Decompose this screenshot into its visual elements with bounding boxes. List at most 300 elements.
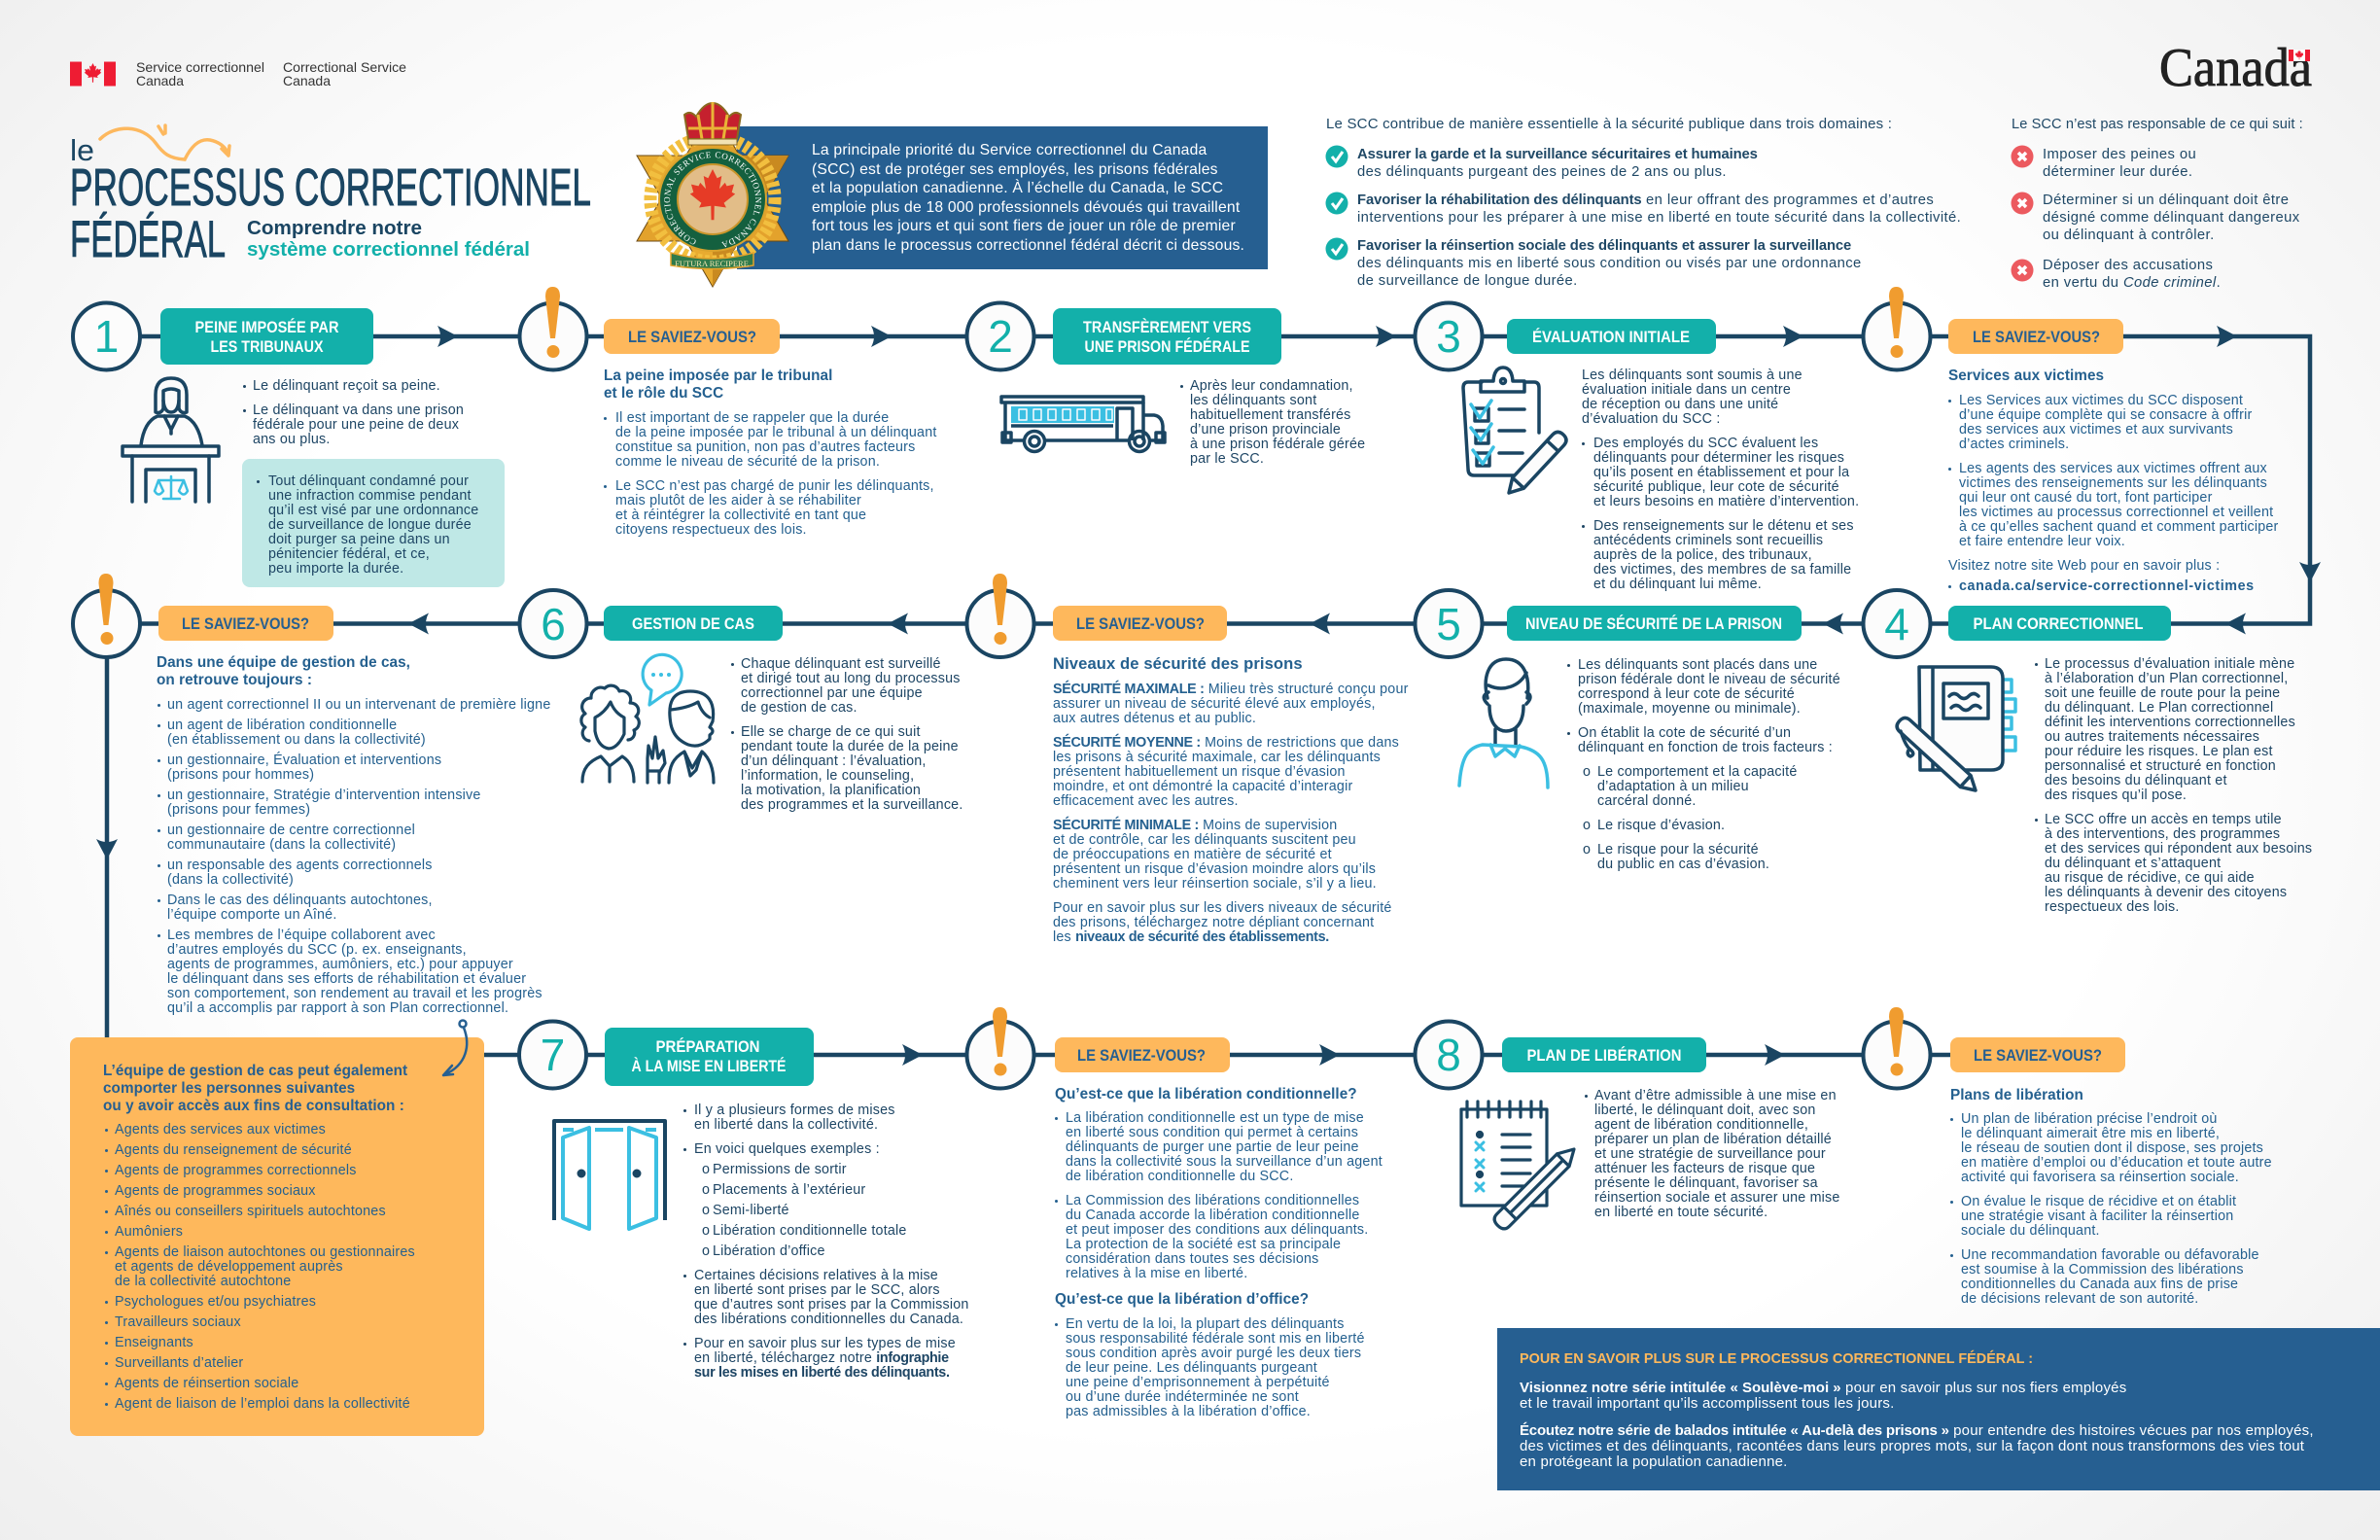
pill: did you know 3: LE SAVIEZ-VOUS? bbox=[182, 614, 309, 633]
text: step 7: Il y a plusieurs formes de mises bbox=[694, 1102, 895, 1118]
text: step 1 note: peu importe la durée. bbox=[268, 561, 403, 577]
text: learn more paragraphs: et le travail important qu’ils accomplissent tous les jours. bbox=[1520, 1395, 1894, 1412]
text: orange panel team list: Agents du renseignement de sécurité bbox=[115, 1142, 352, 1158]
text: step 1: ans ou plus. bbox=[253, 432, 331, 447]
text: step 6: d’un délinquant : l’évaluation, bbox=[741, 753, 927, 769]
text: step 3: de réception ou dans une unité bbox=[1582, 397, 1778, 412]
text: did you know 4 security levels bbox=[1053, 654, 1409, 945]
text: learn more paragraphs: Écoutez notre série de balados intitulée « Au-delà des prisons » pour entendre des histoires vécues par nos employés, bbox=[1520, 1422, 2314, 1439]
text: did you know 5 parole: La libération conditionnelle est un type de mise bbox=[1066, 1110, 1364, 1126]
icon: case management team bbox=[581, 654, 714, 783]
text: did you know 4 security levels: Niveaux de sécurité des prisons bbox=[1053, 654, 1303, 673]
text: did you know 2: victimes des renseignements sur les délinquants bbox=[1959, 475, 2267, 491]
text: step 8 bbox=[1585, 1088, 1840, 1220]
text: did you know 3 team: on retrouve toujours : bbox=[157, 671, 312, 688]
text: step 1: fédérale pour une peine de deux bbox=[253, 416, 459, 432]
text: step 6: correctionnel par une équipe bbox=[741, 685, 923, 701]
text: not responsible list: Imposer des peines ou bbox=[2043, 147, 2196, 162]
text: not responsible list: en vertu du Code criminel. bbox=[2043, 275, 2221, 291]
text: step 7: en liberté sont prises par le SCC, alors bbox=[694, 1282, 940, 1298]
text: did you know 4 security levels: les prisons à sécurité maximale, car les délinquants bbox=[1053, 749, 1381, 764]
pill: did you know 4 bbox=[1053, 606, 1227, 641]
text: step 5: Le risque d’évasion. bbox=[1597, 817, 1725, 832]
text: did you know 2: d’actes criminels. bbox=[1959, 437, 2069, 452]
step 7 number: 7 bbox=[541, 1030, 565, 1080]
text: step 7: en liberté, téléchargez notre infographie bbox=[694, 1350, 949, 1366]
text: did you know 6 release plans: Une recommandation favorable ou défavorable bbox=[1961, 1246, 2259, 1262]
text: did you know 2: les victimes au processus correctionnel et veillent bbox=[1959, 505, 2273, 520]
text: did you know 4 security levels: assurer un niveau de sécurité élevé aux employés, bbox=[1053, 696, 1376, 712]
text: step 5: carcéral donné. bbox=[1597, 793, 1697, 809]
pill: did you know 2: LE SAVIEZ-VOUS? bbox=[1973, 328, 2100, 346]
text: did you know 4 security levels: moindre, et ont démontré la capacité d’interagir bbox=[1053, 778, 1352, 793]
text: SCC three domains intro: Le SCC contribue de manière essentielle à la sécurité publique dans trois domaines : bbox=[1326, 116, 1892, 132]
text: step 7: Libération conditionnelle totale bbox=[713, 1223, 907, 1239]
text: step 6 bbox=[731, 656, 962, 813]
text: step 5: Les délinquants sont placés dans une bbox=[1578, 657, 1817, 673]
text: step 3: antécédents criminels sont recueillis bbox=[1593, 533, 1823, 548]
text: did you know 3 team: communautaire (dans la collectivité) bbox=[167, 836, 396, 852]
pill: did you know 4: LE SAVIEZ-VOUS? bbox=[1076, 614, 1205, 633]
text: step 4: au risque de récidive, ce qui aide bbox=[2045, 870, 2255, 886]
text: step 7: en liberté dans la collectivité. bbox=[694, 1117, 878, 1133]
text: did you know 2: et faire entendre leur voix. bbox=[1959, 534, 2125, 549]
text: did you know 5 parole: de libération conditionnelle du SCC. bbox=[1066, 1169, 1294, 1184]
text: step 1 note: une infraction commise pendant bbox=[268, 488, 472, 504]
text: did you know 6 release plans: le réseau de soutien dont il dispose, ses projets bbox=[1961, 1139, 2263, 1155]
text: step 3: Des employés du SCC évaluent les bbox=[1593, 436, 1818, 451]
step 3 number bbox=[1416, 303, 1482, 369]
text: step 6: la motivation, la planification bbox=[741, 783, 921, 798]
text: step 7 bbox=[683, 1102, 969, 1381]
text: orange panel team list: Travailleurs sociaux bbox=[115, 1314, 241, 1330]
panel: mission intro: emploie plus de 18 000 professionnels dévoués qui travaillent bbox=[812, 199, 1240, 216]
text: step 5: d’adaptation à un milieu bbox=[1597, 778, 1749, 793]
text: step 3: Les délinquants sont soumis à une bbox=[1582, 368, 1802, 383]
text: step 7: Semi-liberté bbox=[713, 1203, 789, 1218]
text: step 5: du public en cas d’évasion. bbox=[1597, 856, 1769, 871]
text: did you know 6 release plans: Un plan de libération précise l’endroit où bbox=[1961, 1110, 2218, 1126]
pill: did you know 6: LE SAVIEZ-VOUS? bbox=[1974, 1046, 2102, 1065]
icon: cross 2 bbox=[2011, 192, 2034, 214]
icon: prison bus bbox=[1001, 397, 1165, 451]
text: orange panel team list: et agents de développement auprès bbox=[115, 1259, 343, 1275]
text: three domains list: de surveillance de longue durée. bbox=[1357, 273, 1578, 289]
text: did you know 6 release plans: Plans de libération bbox=[1950, 1087, 2083, 1102]
panel: mission intro: et la population canadienne. À l’échelle du Canada, le SCC bbox=[812, 180, 1223, 196]
icon: CSC crest bbox=[636, 102, 789, 288]
text: step 3: et du délinquant lui même. bbox=[1593, 576, 1762, 591]
text: orange panel team list: comporter les personnes suivantes bbox=[103, 1080, 355, 1097]
text: did you know 2: à ce qu’elles sachent quand et comment participer bbox=[1959, 519, 2279, 535]
text: three domains list bbox=[1357, 147, 1961, 289]
text: step 8: liberté, le délinquant doit, avec son bbox=[1594, 1102, 1816, 1118]
text: did you know 3 team: un gestionnaire de centre correctionnel bbox=[167, 822, 415, 838]
pill: did you know 3 bbox=[158, 606, 333, 641]
pill: step 5 heading bbox=[1507, 606, 1802, 641]
text: learn more paragraphs: en protégeant la population canadienne. bbox=[1520, 1453, 1788, 1470]
text: step 4: à des interventions, des programmes bbox=[2045, 826, 2280, 842]
text: did you know 4 security levels: des prisons, téléchargez notre dépliant concernant bbox=[1053, 914, 1374, 929]
text: three domains list: des délinquants purgeant des peines de 2 ans ou plus. bbox=[1357, 164, 1727, 180]
text: did you know 4 security levels: présentent un risque d’évasion moindre alors qu’ils bbox=[1053, 861, 1376, 877]
text: orange panel team list: Agents de liaison autochtones ou gestionnaires bbox=[115, 1244, 415, 1260]
text: did you know 5 parole: En vertu de la loi, la plupart des délinquants bbox=[1066, 1316, 1345, 1332]
text: step 7: En voici quelques exemples : bbox=[694, 1141, 880, 1157]
step 1 number bbox=[73, 303, 140, 369]
text: step 1: Le délinquant va dans une prison bbox=[253, 402, 464, 418]
text: did you know 5 parole: en liberté sous condition qui permet à certains bbox=[1066, 1125, 1358, 1140]
text: did you know 5 parole: une peine d’emprisonnement à perpétuité bbox=[1066, 1375, 1330, 1390]
text: step 6: des programmes et la surveillance. bbox=[741, 797, 962, 813]
text: three domains list: des délinquants mis en liberté sous condition ou visés par une ordonnance bbox=[1357, 256, 1862, 271]
text: step 5: délinquant en fonction de trois facteurs : bbox=[1578, 739, 1833, 754]
text: step 4: Le processus d’évaluation initiale mène bbox=[2045, 656, 2294, 672]
pill: step 4 heading: PLAN CORRECTIONNEL bbox=[1974, 614, 2143, 633]
text: did you know 3 team: (en établissement ou dans la collectivité) bbox=[167, 731, 426, 747]
text: did you know 2: Services aux victimes bbox=[1948, 368, 2104, 384]
text: step 2: les délinquants sont bbox=[1190, 393, 1316, 408]
text: did you know 5 parole: La protection de la société est sa principale bbox=[1066, 1237, 1341, 1252]
icon: judge at podium bbox=[122, 378, 219, 502]
text: step 4: du délinquant et s’attaquent bbox=[2045, 856, 2221, 871]
text: orange panel team list: Aumôniers bbox=[115, 1224, 183, 1240]
text: not responsible list: Déposer des accusations bbox=[2043, 258, 2213, 273]
text: did you know 1: Il est important de se rappeler que la durée bbox=[615, 410, 889, 426]
text: did you know 1 bbox=[604, 368, 937, 537]
pill: step 1 heading: PEINE IMPOSÉE PAR bbox=[194, 318, 338, 336]
text: step 7: Certaines décisions relatives à la mise bbox=[694, 1268, 938, 1283]
text: did you know 4 security levels: SÉCURITÉ MOYENNE : Moins de restrictions que dans bbox=[1053, 735, 1399, 751]
text: step 7: que d’autres sont prises par la Commission bbox=[694, 1297, 969, 1312]
text: step 8: Avant d’être admissible à une mise en bbox=[1594, 1088, 1837, 1103]
title bbox=[70, 133, 591, 268]
subtitle bbox=[247, 218, 530, 261]
text: did you know 6 release plans: conditionnelles du Canada aux fins de prise bbox=[1961, 1276, 2238, 1291]
text: orange panel team list: Surveillants d’atelier bbox=[115, 1355, 243, 1371]
wordmark: Correctional Service Canada bbox=[283, 59, 406, 88]
text: step 7: Libération d’office bbox=[713, 1243, 825, 1259]
pill: step 3 heading: ÉVALUATION INITIALE bbox=[1532, 328, 1690, 346]
text: did you know 3 team: son comportement, son rendement au travail et les progrès bbox=[167, 986, 542, 1001]
step 6 number bbox=[519, 590, 587, 657]
text: did you know 3 team: qu’il a accomplis par rapport à son Plan correctionnel. bbox=[167, 999, 508, 1015]
text: orange panel team list bbox=[103, 1063, 415, 1412]
text: did you know 5 parole: La Commission des libérations conditionnelles bbox=[1066, 1193, 1359, 1208]
text: did you know 5 parole: dans la collectivité sous la surveillance d’un agent bbox=[1066, 1154, 1382, 1170]
icon: orange jumping arrow bbox=[100, 125, 229, 159]
text: step 4: soit une feuille de route pour la peine bbox=[2045, 685, 2280, 701]
text: step 1 note bbox=[257, 473, 478, 577]
logo: Canada flag bbox=[70, 62, 116, 86]
step 4 number: 4 bbox=[1884, 599, 1909, 649]
text: step 3: qu’ils posent en établissement et pour la bbox=[1593, 465, 1849, 480]
text: step 4: pour réduire les risques. Le plan est bbox=[2045, 744, 2273, 759]
text: did you know 6 release plans: le délinquant aimerait être mis en liberté, bbox=[1961, 1126, 2220, 1141]
title: PROCESSUS CORRECTIONNEL bbox=[70, 158, 591, 217]
text: did you know 6 release plans: en matière d’emploi ou d’éducation et toute autre bbox=[1961, 1155, 2272, 1171]
text: did you know 4 security levels: les niveaux de sécurité des établissements. bbox=[1053, 929, 1329, 945]
text: step 4: ou autres traitements nécessaires bbox=[2045, 729, 2259, 745]
text: step 6: Chaque délinquant est surveillé bbox=[741, 656, 941, 672]
pill: did you know 2 bbox=[1948, 319, 2123, 354]
text: did you know 1: de la peine imposée par le tribunal à un délinquant bbox=[615, 424, 937, 439]
text: orange panel team list: Aînés ou conseillers spirituels autochtones bbox=[115, 1204, 386, 1219]
text: step 7: sur les mises en liberté des délinquants. bbox=[694, 1365, 950, 1381]
text: step 2: habituellement transférés bbox=[1190, 406, 1351, 422]
text: learn more paragraphs: des victimes et des délinquants, racontées dans leurs propres mots, sur la façon dont nous transformons des vies tout bbox=[1520, 1438, 2304, 1454]
text: step 3: auprès de la police, des tribunaux, bbox=[1593, 546, 1812, 562]
pill: step 1 heading: LES TRIBUNAUX bbox=[210, 337, 324, 356]
text: step 8: agent de libération conditionnelle, bbox=[1594, 1117, 1808, 1133]
text: learn more paragraphs: Visionnez notre série intitulée « Soulève-moi » pour en savoir plus sur nos fiers employés bbox=[1520, 1380, 2126, 1396]
text: did you know 5 parole: considération dans toutes ses décisions bbox=[1066, 1251, 1319, 1267]
step 8 number bbox=[1416, 1021, 1482, 1089]
pill: step 7 heading bbox=[605, 1028, 814, 1086]
panel: mission intro: plan dans le processus correctionnel fédéral décrit ci dessous. bbox=[812, 237, 1244, 254]
icon: exclamation marker 4 bbox=[966, 574, 1034, 657]
wordmark: Correctional Service Canada: Correctional Service bbox=[283, 59, 406, 75]
step 8 number: 8 bbox=[1436, 1030, 1461, 1080]
text: did you know 4 security levels: SÉCURITÉ MINIMALE : Moins de supervision bbox=[1053, 817, 1337, 832]
pill: step 8 heading: PLAN DE LIBÉRATION bbox=[1526, 1046, 1682, 1065]
text: did you know 6 release plans bbox=[1950, 1087, 2272, 1307]
subtitle: système correctionnel fédéral bbox=[247, 239, 530, 261]
panel: orange case management team bbox=[70, 1037, 484, 1436]
text: step 6: Elle se charge de ce qui suit bbox=[741, 724, 921, 740]
text: did you know 3 team: l’équipe comporte un Aîné. bbox=[167, 906, 336, 922]
pill: step 1 heading bbox=[160, 308, 373, 365]
text: step 2 bbox=[1180, 377, 1365, 467]
text: step 7: Pour en savoir plus sur les types de mise bbox=[694, 1336, 956, 1351]
text: did you know 4 security levels: aux autres détenus et au public. bbox=[1053, 710, 1256, 725]
text: step 6: l’information, le counseling, bbox=[741, 768, 914, 784]
text: did you know 5 parole: du Canada accorde la libération conditionnelle bbox=[1066, 1208, 1359, 1223]
text: not responsible list: Déterminer si un délinquant doit être bbox=[2043, 192, 2289, 208]
text: did you know 2: des services aux victimes et aux survivants bbox=[1959, 422, 2233, 438]
text: step 6: et dirigé tout au long du processus bbox=[741, 671, 961, 686]
step 3 number: 3 bbox=[1436, 311, 1461, 362]
text: step 1: Le délinquant reçoit sa peine. bbox=[253, 377, 440, 393]
text: step 8: réinsertion sociale et assurer une mise bbox=[1594, 1190, 1840, 1206]
text: step 7: Placements à l’extérieur bbox=[713, 1182, 865, 1198]
text: orange panel team list: de la collectivité autochtone bbox=[115, 1274, 291, 1289]
text: step 3: délinquants pour déterminer les risques bbox=[1593, 449, 1844, 465]
text: step 5 bbox=[1567, 657, 1840, 871]
text: three domains list: Assurer la garde et la surveillance sécuritaires et humaines bbox=[1357, 147, 1758, 162]
text: did you know 4 security levels: cheminent vers leur réinsertion sociale, s’il y a lieu. bbox=[1053, 875, 1377, 891]
pill: did you know 1: LE SAVIEZ-VOUS? bbox=[628, 328, 756, 346]
text: did you know 1: et le rôle du SCC bbox=[604, 385, 723, 402]
text: did you know 3 team: agents de programmes, aumôniers, etc.) pour appuyer bbox=[167, 957, 513, 972]
text: did you know 3 team: (prisons pour femmes) bbox=[167, 801, 310, 817]
text: step 1 bbox=[243, 377, 464, 447]
icon: person bbox=[1459, 659, 1548, 788]
wordmark: Service correctionnel Canada: Service correctionnel bbox=[136, 59, 264, 75]
icon: CSC crest: FUTURA RECIPERE bbox=[675, 259, 749, 268]
heading: learn more: POUR EN SAVOIR PLUS SUR LE PROCESSUS CORRECTIONNEL FÉDÉRAL : bbox=[1520, 1350, 2033, 1367]
text: step 8: et une stratégie de surveillance pour bbox=[1594, 1146, 1826, 1162]
title: FÉDÉRAL bbox=[70, 211, 226, 268]
text: step 6: de gestion de cas. bbox=[741, 700, 858, 716]
text: not responsible list bbox=[2043, 147, 2300, 291]
text: did you know 4 security levels: et de contrôle, car les délinquants suscitent peu bbox=[1053, 832, 1356, 848]
text: did you know 3 team: (dans la collectivité) bbox=[167, 871, 294, 887]
text: step 5: correspond à leur cote de sécurité bbox=[1578, 686, 1795, 702]
text: step 5: (maximale, moyenne ou minimale). bbox=[1578, 700, 1801, 716]
title: le bbox=[70, 133, 94, 167]
pill: step 6 heading: GESTION DE CAS bbox=[632, 614, 754, 633]
text: step 5: prison fédérale dont le niveau de sécurité bbox=[1578, 671, 1840, 686]
text: step 8: présente le délinquant, favoriser sa bbox=[1594, 1175, 1818, 1191]
text: did you know 5 parole: et peut imposer des conditions aux délinquants. bbox=[1066, 1222, 1368, 1238]
pill: step 2 heading: UNE PRISON FÉDÉRALE bbox=[1085, 337, 1250, 356]
text: step 4: définit les interventions correctionnelles bbox=[2045, 715, 2295, 730]
text: step 4: respectueux des lois. bbox=[2045, 899, 2180, 915]
step 7 number bbox=[519, 1021, 586, 1089]
text: did you know 1: et à réintégrer la collectivité en tant que bbox=[615, 508, 866, 523]
wordmark: Canada: Canada bbox=[2159, 38, 2312, 98]
text: did you know 3 team: un agent de libération conditionnelle bbox=[167, 718, 397, 733]
text: did you know 4 security levels: de préoccupations en matière de sécurité et bbox=[1053, 846, 1332, 861]
panel: learn more bbox=[1497, 1328, 2380, 1490]
text: did you know 6 release plans: sociale du délinquant. bbox=[1961, 1223, 2100, 1239]
panel: mission intro: (SCC) est de protéger ses employés, les prisons fédérales bbox=[812, 161, 1218, 178]
text: step 4: et des services qui répondent aux besoins bbox=[2045, 841, 2312, 857]
text: did you know 1: mais plutôt de les aider à se réhabiliter bbox=[615, 492, 861, 508]
pill: step 2 heading bbox=[1053, 308, 1281, 365]
text: did you know 3 team: un responsable des agents correctionnels bbox=[167, 858, 433, 873]
text: did you know 3 team: un gestionnaire, Stratégie d’intervention intensive bbox=[167, 788, 481, 803]
text: step 8: atténuer les facteurs de risque que bbox=[1594, 1161, 1815, 1176]
step 2 number: 2 bbox=[988, 311, 1013, 362]
text: did you know 3 team: (prisons pour hommes) bbox=[167, 766, 314, 782]
text: did you know 5 parole: ou d’une durée indéterminée ne sont bbox=[1066, 1389, 1299, 1405]
text: did you know 5 parole: délinquants de purger une partie de leur peine bbox=[1066, 1139, 1359, 1155]
text: step 1 note: pénitencier fédéral, et ce, bbox=[268, 546, 430, 562]
icon: check 1 bbox=[1326, 146, 1348, 167]
text: step 3 bbox=[1582, 368, 1859, 591]
panel: teal note, step 1 bbox=[242, 459, 505, 587]
text: step 1 note: qu’il est visé par une ordonnance bbox=[268, 503, 478, 518]
icon: exclamation marker 6 bbox=[1863, 1007, 1931, 1089]
text: did you know 6 release plans: est soumise à la Commission des libérations bbox=[1961, 1262, 2244, 1278]
text: did you know 5 parole: de leur peine. Les délinquants purgeant bbox=[1066, 1360, 1317, 1376]
icon: check 2 bbox=[1326, 192, 1348, 214]
panel: mission intro: fort tous les jours et qui sont fiers de jouer un rôle de premier bbox=[812, 218, 1236, 234]
text: step 5: Le risque pour la sécurité bbox=[1597, 842, 1759, 858]
text: step 4: les délinquants à devenir des citoyens bbox=[2045, 885, 2287, 900]
text: step 5: On établit la cote de sécurité d’un bbox=[1578, 725, 1791, 741]
text: step 4: personnalisé et structuré en fonction bbox=[2045, 758, 2276, 774]
text: orange panel team list: Enseignants bbox=[115, 1335, 193, 1350]
text: orange panel team list: Psychologues et/ou psychiatres bbox=[115, 1294, 316, 1310]
pill: step 7 heading: PRÉPARATION bbox=[655, 1037, 760, 1056]
text: did you know 2 bbox=[1948, 368, 2279, 594]
text: did you know 1: citoyens respectueux des lois. bbox=[615, 521, 807, 537]
text: step 4: à l’élaboration d’un Plan correctionnel, bbox=[2045, 671, 2288, 686]
icon: cross 1 bbox=[2011, 146, 2034, 167]
text: did you know 4 security levels: présentent habituellement un risque d’évasion bbox=[1053, 764, 1346, 780]
icon: exclamation marker 2 bbox=[1863, 287, 1931, 369]
text: step 8: en liberté en toute sécurité. bbox=[1594, 1205, 1768, 1220]
text: orange panel team list: Agents de programmes correctionnels bbox=[115, 1163, 357, 1178]
text: did you know 1: constitue sa punition, non pas d’autres facteurs bbox=[615, 439, 915, 455]
text: three domains list: Favoriser la réinsertion sociale des délinquants et assurer la surveillance bbox=[1357, 238, 1851, 254]
text: step 4: des besoins du délinquant et bbox=[2045, 773, 2227, 788]
pill: did you know 5 bbox=[1055, 1037, 1230, 1072]
text: did you know 2: qui leur ont causé du tort, font participer bbox=[1959, 490, 2213, 506]
text: step 1 note: de surveillance de longue durée bbox=[268, 517, 472, 533]
icon: CSC crest: CORRECTIONAL SERVICE CORRECTIONNEL CANADA bbox=[664, 152, 762, 247]
icon: exclamation marker 3 bbox=[73, 574, 140, 657]
pill: did you know 1 bbox=[604, 319, 780, 354]
text: step 1 note: Tout délinquant condamné pour bbox=[268, 473, 469, 489]
step 4 number bbox=[1863, 590, 1931, 657]
text: step 2: d’une prison provinciale bbox=[1190, 422, 1341, 438]
step 1 number: 1 bbox=[94, 311, 119, 362]
text: did you know 4 security levels: SÉCURITÉ MAXIMALE : Milieu très structuré conçu pour bbox=[1053, 681, 1409, 696]
text: did you know 4 security levels: efficacement avec les autres. bbox=[1053, 793, 1239, 809]
text: did you know 4 security levels: Pour en savoir plus sur les divers niveaux de sécurité bbox=[1053, 900, 1392, 916]
text: did you know 6 release plans: On évalue le risque de récidive et on établit bbox=[1961, 1194, 2236, 1209]
text: did you know 6 release plans: de décisions relevant de son autorité. bbox=[1961, 1291, 2198, 1307]
text: step 7: Permissions de sortir bbox=[713, 1162, 847, 1177]
icon: check 3 bbox=[1326, 237, 1348, 261]
text: step 5: Le comportement et la capacité bbox=[1597, 764, 1797, 780]
text: step 3: d’évaluation du SCC : bbox=[1582, 410, 1721, 426]
pill: step 4 heading bbox=[1948, 606, 2171, 641]
text: orange panel team list: Agent de liaison de l’emploi dans la collectivité bbox=[115, 1396, 410, 1412]
panel: mission intro: La principale priorité du Service correctionnel du Canada bbox=[812, 142, 1207, 158]
icon: release plan notepad bbox=[1461, 1102, 1580, 1232]
text: did you know 6 release plans: activité qui favorisera sa réinsertion sociale. bbox=[1961, 1169, 2239, 1184]
text: did you know 3 team: Dans le cas des délinquants autochtones, bbox=[167, 892, 433, 908]
pill: step 2 heading: TRANSFÈREMENT VERS bbox=[1083, 318, 1251, 336]
text: step 7: des libérations conditionnelles du Canada. bbox=[694, 1312, 963, 1327]
step 2 number bbox=[966, 303, 1034, 369]
text: step 3: Des renseignements sur le détenu et ses bbox=[1593, 517, 1854, 533]
text: not responsible list: ou délinquant à contrôler. bbox=[2043, 228, 2215, 243]
text: did you know 5 parole: pas admissibles à la libération d’office. bbox=[1066, 1404, 1311, 1419]
step 6 number: 6 bbox=[541, 599, 566, 649]
text: step 3: des victimes, des membres de sa famille bbox=[1593, 562, 1851, 578]
text: step 8: préparer un plan de libération détaillé bbox=[1594, 1132, 1832, 1147]
text: not responsible list: déterminer leur durée. bbox=[2043, 164, 2192, 180]
text: did you know 3 team: Dans une équipe de gestion de cas, bbox=[157, 653, 410, 671]
text: step 2: Après leur condamnation, bbox=[1190, 377, 1353, 393]
text: orange panel team list: L’équipe de gestion de cas peut également bbox=[103, 1063, 407, 1079]
text: learn more paragraphs bbox=[1520, 1380, 2314, 1470]
text: orange panel team list: Agents des services aux victimes bbox=[115, 1122, 326, 1138]
text: did you know 5 parole bbox=[1055, 1086, 1382, 1419]
text: did you know 1: Le SCC n’est pas chargé de punir les délinquants, bbox=[615, 478, 934, 494]
text: did you know 1: La peine imposée par le tribunal bbox=[604, 368, 832, 384]
text: did you know 2: canada.ca/service-correctionnel-victimes bbox=[1959, 578, 2255, 594]
text: orange panel team list: Agents de réinsertion sociale bbox=[115, 1376, 298, 1391]
text: step 2: par le SCC. bbox=[1190, 451, 1264, 467]
icon: exclamation marker 1 bbox=[519, 287, 587, 369]
text: step 3: évaluation initiale dans un centre bbox=[1582, 381, 1791, 397]
timeline connector line bbox=[107, 336, 2310, 1055]
text: orange panel team list: Agents de programmes sociaux bbox=[115, 1183, 316, 1199]
text: step 6: pendant toute la durée de la peine bbox=[741, 739, 959, 754]
pill: step 6 heading bbox=[604, 606, 783, 641]
panel: mission intro bbox=[737, 126, 1268, 269]
text: did you know 2: Les Services aux victimes du SCC disposent bbox=[1959, 393, 2243, 408]
text: orange panel team list: ou y avoir accès aux fins de consultation : bbox=[103, 1098, 404, 1114]
step 5 number: 5 bbox=[1436, 599, 1461, 649]
